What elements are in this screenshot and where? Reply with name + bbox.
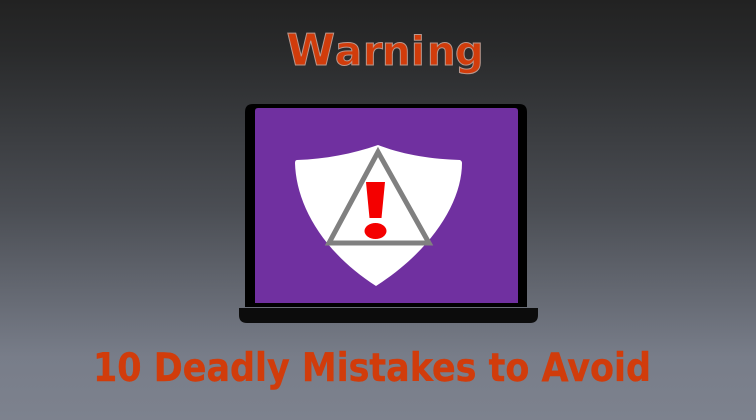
laptop lid [245,104,527,307]
laptop screen [255,108,518,303]
laptop base [239,308,538,323]
icon: shield [295,145,462,286]
icon: exclamation mark [364,182,386,239]
title: Warning: W [286,25,335,76]
title: Warning: arning [335,29,484,75]
icon: laptop with warning shield [239,104,538,323]
subtitle: 10 Deadly Mistakes to Avoid: 10 Deadly Mistakes to Avoid [93,346,651,391]
icon: warning triangle [329,152,429,243]
